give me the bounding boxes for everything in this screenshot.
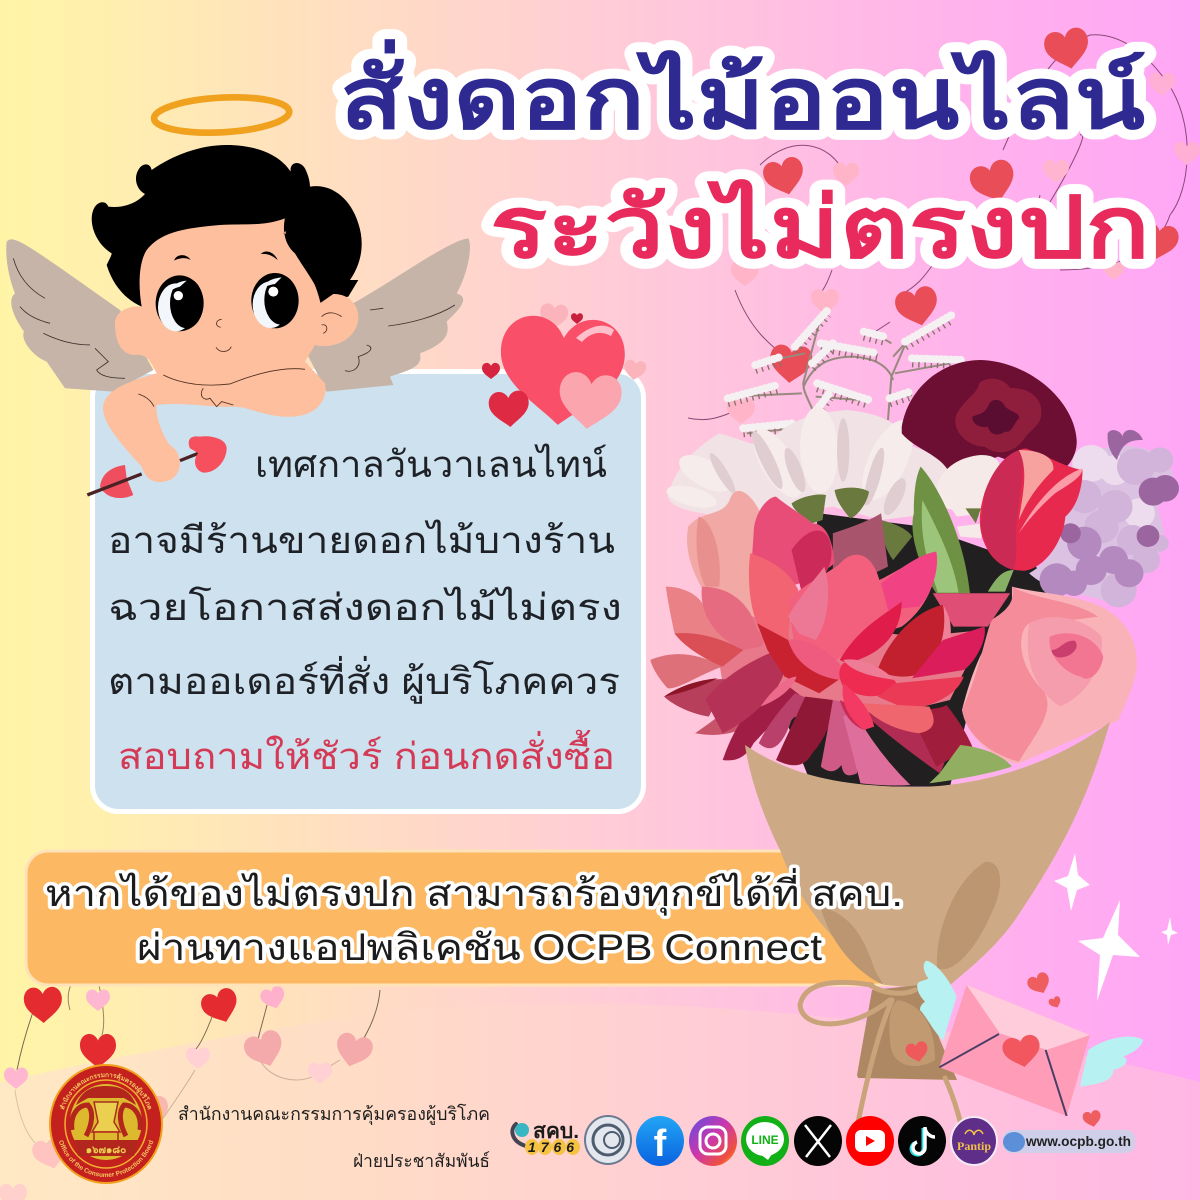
maroon dahlia bbox=[902, 360, 1077, 477]
cupid body bbox=[103, 218, 358, 482]
wing left bbox=[917, 961, 957, 1040]
lotus upper petals bbox=[750, 497, 835, 587]
icon: Facebook bbox=[636, 1116, 684, 1166]
baby's breath stems bbox=[730, 317, 950, 433]
background lower swoosh bbox=[0, 1004, 1200, 1200]
orange call-to-action box bbox=[26, 851, 916, 985]
website link pill bbox=[1003, 1130, 1135, 1153]
icon: LINE: LINE bbox=[751, 1133, 779, 1147]
bouquet bbox=[650, 310, 1179, 1145]
halo bbox=[153, 94, 290, 136]
OCPB seal: Office of the Consumer Protection Board bbox=[59, 1140, 154, 1177]
red lotus flower bbox=[650, 497, 1012, 786]
mauve petal bbox=[833, 513, 888, 593]
hotline badge bbox=[512, 1120, 580, 1155]
message card bbox=[92, 372, 644, 812]
cupid bbox=[6, 94, 470, 498]
cupid eyes and brows bbox=[156, 252, 299, 331]
background hearts and strings, bottom left bbox=[0, 974, 380, 1200]
ribbon and bow bbox=[800, 982, 965, 1145]
hotline badge: 1766 bbox=[528, 1139, 580, 1155]
cupid arrow bbox=[87, 436, 227, 498]
green seed pods bbox=[792, 488, 981, 560]
call-to-action text line 1: หากได้ของไม่ตรงปก สามารถร้องทุกข์ได้ที่ สคบ. bbox=[45, 867, 903, 916]
cupid wings bbox=[6, 238, 470, 392]
icon: TikTok bbox=[898, 1116, 946, 1166]
card line 2: อาจมีร้านขายดอกไม้บางร้าน bbox=[108, 519, 615, 561]
lotus lower petals bbox=[695, 697, 759, 735]
icon: Instagram bbox=[689, 1116, 737, 1166]
heart cluster on card bbox=[482, 303, 647, 432]
cupid hair bbox=[92, 145, 362, 307]
flowers bbox=[650, 310, 1179, 787]
baby's breath blossoms bbox=[728, 310, 964, 433]
hotline badge: สคบ. bbox=[533, 1120, 579, 1143]
footer department name: ฝ่ายประชาสัมพันธ์ bbox=[353, 1151, 490, 1171]
flying love letter bbox=[917, 961, 1143, 1116]
OCPB seal: สำนักงานคณะกรรมการคุ้มครองผู้บริโภค bbox=[60, 1073, 152, 1110]
wrap inner folds bbox=[937, 862, 1000, 969]
white small blooms over dahlia bbox=[936, 455, 1000, 538]
OCPB seal: ๑๖๗๑๘๐ bbox=[86, 1145, 126, 1156]
icon: Pantip bbox=[951, 1117, 997, 1165]
bag below knot bbox=[857, 985, 957, 1080]
icon: Facebook: f bbox=[654, 1123, 667, 1165]
website link pill: www.ocpb.go.th bbox=[1025, 1134, 1131, 1149]
card line 3: ฉวยโอกาสส่งดอกไม้ไม่ตรง bbox=[108, 586, 622, 628]
card line 4: ตามออเดอร์ที่สั่ง ผู้บริโภคควร bbox=[108, 655, 620, 704]
small heart on bag bbox=[904, 1040, 930, 1064]
hydrangea bbox=[1029, 430, 1179, 607]
rose bbox=[962, 587, 1137, 763]
icon: LINE bbox=[741, 1116, 789, 1166]
icon: X bbox=[794, 1116, 842, 1166]
lotus left petals bbox=[664, 679, 733, 717]
icon: YouTube bbox=[846, 1116, 894, 1166]
background hearts and strings, top right bbox=[688, 25, 1200, 424]
footer organisation name: สำนักงานคณะกรรมการคุ้มครองผู้บริโภค bbox=[178, 1103, 490, 1125]
dark backing bbox=[778, 513, 1050, 787]
title line 2: ระวังไม่ตรงปก bbox=[490, 179, 1150, 276]
envelope body bbox=[939, 985, 1090, 1116]
sparkles bbox=[1054, 853, 1178, 1001]
wing right bbox=[1080, 1037, 1143, 1087]
small hearts near letter bbox=[1025, 971, 1103, 1129]
title line 1: สั่งดอกไม้ออนไลน์ bbox=[340, 39, 1145, 147]
icon: OCPB app bbox=[585, 1116, 631, 1164]
OCPB seal bbox=[49, 1064, 163, 1184]
kraft paper wrap bbox=[745, 722, 1110, 990]
icon: Pantip: Pantip bbox=[957, 1139, 991, 1153]
green leaf bbox=[912, 467, 970, 593]
call-to-action text line 2: ผ่านทางแอปพลิเคชัน OCPB Connect bbox=[137, 927, 823, 968]
white chrysanthemum bbox=[664, 406, 1003, 520]
salmon back flower bbox=[687, 491, 774, 620]
tulip bbox=[980, 448, 1083, 571]
card line 5: สอบถามให้ชัวร์ ก่อนกดสั่งซื้อ bbox=[118, 729, 615, 777]
card line 1: เทศกาลวันวาเลนไทน์ bbox=[255, 443, 607, 485]
